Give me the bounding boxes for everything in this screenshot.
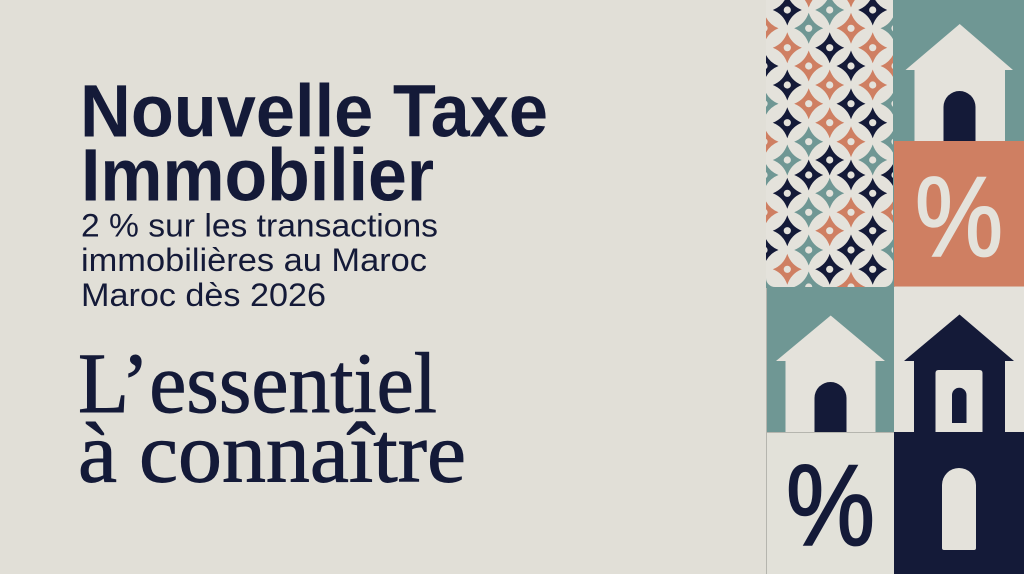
- title: [80, 70, 548, 217]
- heading: l'essentiel à connaître: L’essentiel: [78, 335, 437, 431]
- panel: teal house lower left: [766, 288, 894, 432]
- panel: coral percent: %: [915, 154, 1003, 280]
- panel: navy door: [894, 432, 1024, 574]
- subtitle: [81, 208, 438, 313]
- subtitle: 2 % sur les transactions: [81, 208, 438, 244]
- panel: teal house top right: [894, 0, 1024, 142]
- panel: coral percent: [894, 141, 1024, 286]
- heading: l'essentiel à connaître: [78, 335, 466, 500]
- panel: navy house on cream: [894, 287, 1024, 432]
- panel: geometric star pattern: [766, 0, 894, 288]
- title: Immobilier: [81, 134, 434, 217]
- heading: l'essentiel à connaître: à connaître: [78, 404, 466, 500]
- subtitle: immobilières au Maroc: [81, 242, 427, 278]
- panel: cream percent: %: [786, 442, 875, 570]
- panel: cream percent: [766, 288, 894, 574]
- title: Nouvelle Taxe: [80, 70, 548, 153]
- subtitle: Maroc dès 2026: [81, 277, 326, 313]
